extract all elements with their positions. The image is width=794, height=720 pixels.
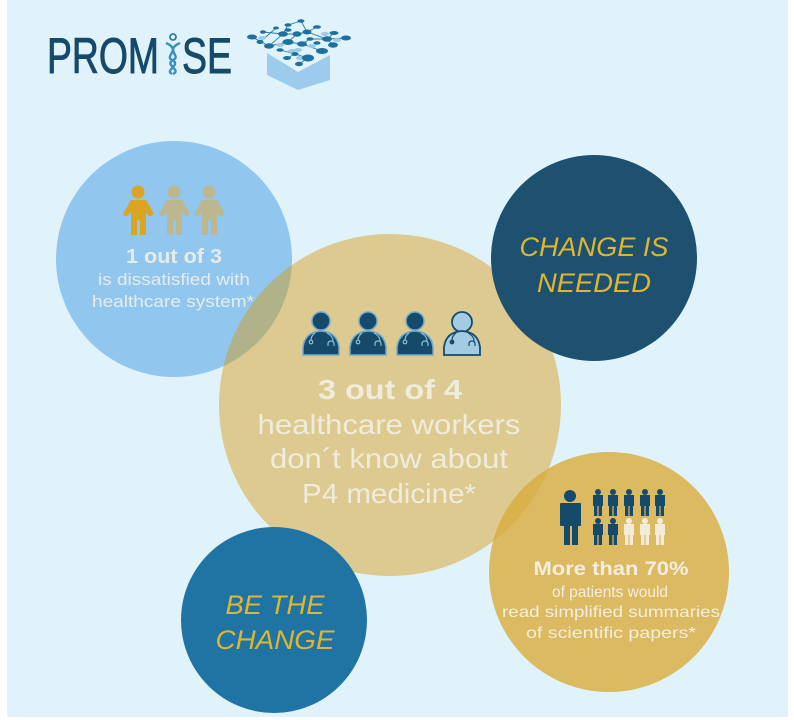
text: 3 out of 4: 3 out of 4 xyxy=(318,374,462,405)
text: change is needed: CHANGE IS xyxy=(520,232,668,262)
logo icon: network cube xyxy=(247,19,351,90)
text: 1 out of 3: healthcare system* xyxy=(92,293,255,311)
text: more than 70%: read simplified summaries xyxy=(502,604,720,621)
logo wordmark: PROM xyxy=(47,28,159,84)
panel: 1 out of 3 circle xyxy=(56,141,292,377)
text: 3 out of 4: P4 medicine* xyxy=(302,478,476,509)
text: 3 out of 4: don´t know about xyxy=(270,443,508,474)
panel: be the change circle xyxy=(181,527,367,713)
text: 1 out of 3: is dissatisfied with xyxy=(98,271,250,289)
text: more than 70% xyxy=(502,559,720,642)
icon: four doctors xyxy=(303,312,480,355)
logo wordmark: SE xyxy=(182,28,232,84)
panel: 3 out of 4 circle xyxy=(219,234,561,576)
text: more than 70%: More than 70% xyxy=(534,559,689,580)
text: be the change: BE THE xyxy=(226,590,325,620)
text: 3 out of 4: healthcare workers xyxy=(258,409,520,440)
panel: more than 70% circle xyxy=(489,452,729,692)
text: 1 out of 3: 1 out of 3 xyxy=(126,246,222,268)
text: 3 out of 4 xyxy=(258,374,520,509)
text: more than 70%: of patients would xyxy=(552,584,668,601)
icon: patients xyxy=(560,489,665,545)
text: change is needed: NEEDED xyxy=(537,268,651,298)
text: be the change: CHANGE xyxy=(216,625,336,655)
text: change is needed xyxy=(520,232,668,298)
text: be the change xyxy=(216,590,336,655)
icon: three people xyxy=(123,186,224,235)
text: 1 out of 3 xyxy=(92,246,255,311)
panel: change is needed circle xyxy=(491,155,697,361)
text: more than 70%: of scientific papers* xyxy=(526,625,696,642)
